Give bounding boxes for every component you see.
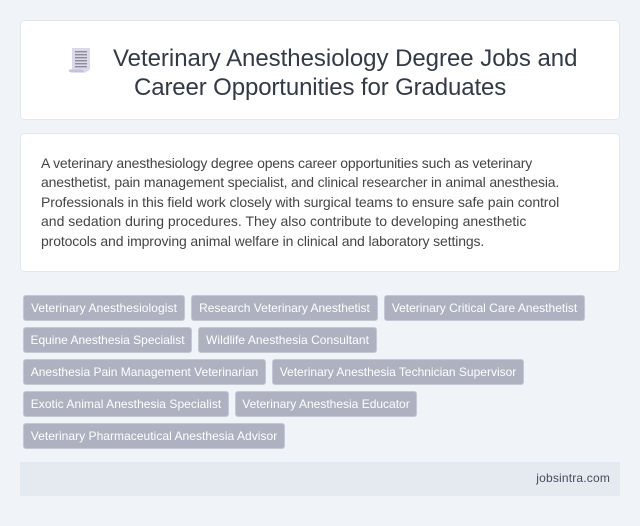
title: Career Opportunities for Graduates	[134, 74, 506, 101]
job tags	[23, 295, 585, 449]
tag	[23, 295, 185, 321]
description text: A veterinary anesthesiology degree opens career opportunities such as veterinary	[41, 155, 532, 171]
footer bar	[20, 462, 620, 496]
tag	[384, 295, 585, 321]
tag: Veterinary Critical Care Anesthetist	[392, 301, 577, 315]
tag	[235, 391, 417, 417]
tag	[23, 391, 229, 417]
tag: Research Veterinary Anesthetist	[199, 301, 370, 315]
panel: title card	[20, 20, 620, 120]
tag: Exotic Animal Anesthesia Specialist	[31, 397, 221, 411]
description text: and sedation during procedures. They also contribute to developing anesthetic	[41, 213, 526, 229]
icon: document scroll	[69, 48, 90, 72]
tag	[23, 423, 285, 449]
tag: Wildlife Anesthesia Consultant	[206, 333, 369, 347]
tag: Veterinary Pharmaceutical Anesthesia Advisor	[31, 429, 277, 443]
title	[113, 45, 577, 101]
description text: Professionals in this field work closely with surgical teams to ensure safe pain control	[41, 194, 559, 210]
tag	[23, 327, 192, 353]
tag: Equine Anesthesia Specialist	[30, 333, 185, 347]
description text	[41, 155, 559, 249]
tag: Veterinary Anesthesia Educator	[242, 397, 410, 411]
panel: description card	[20, 133, 620, 272]
tag: Anesthesia Pain Management Veterinarian	[31, 365, 258, 379]
tag	[272, 359, 524, 385]
footer source text: jobsintra.com	[536, 471, 610, 485]
tag	[191, 295, 378, 321]
tag: Veterinary Anesthesia Technician Supervisor	[280, 365, 516, 379]
description text: anesthetist, pain management specialist, and clinical researcher in animal anesthesia.	[41, 174, 559, 190]
tag	[23, 359, 266, 385]
tag: Veterinary Anesthesiologist	[31, 301, 177, 315]
tag	[198, 327, 377, 353]
description text: protocols and improving animal welfare in clinical and laboratory settings.	[41, 233, 484, 249]
title: Veterinary Anesthesiology Degree Jobs and	[113, 45, 577, 72]
